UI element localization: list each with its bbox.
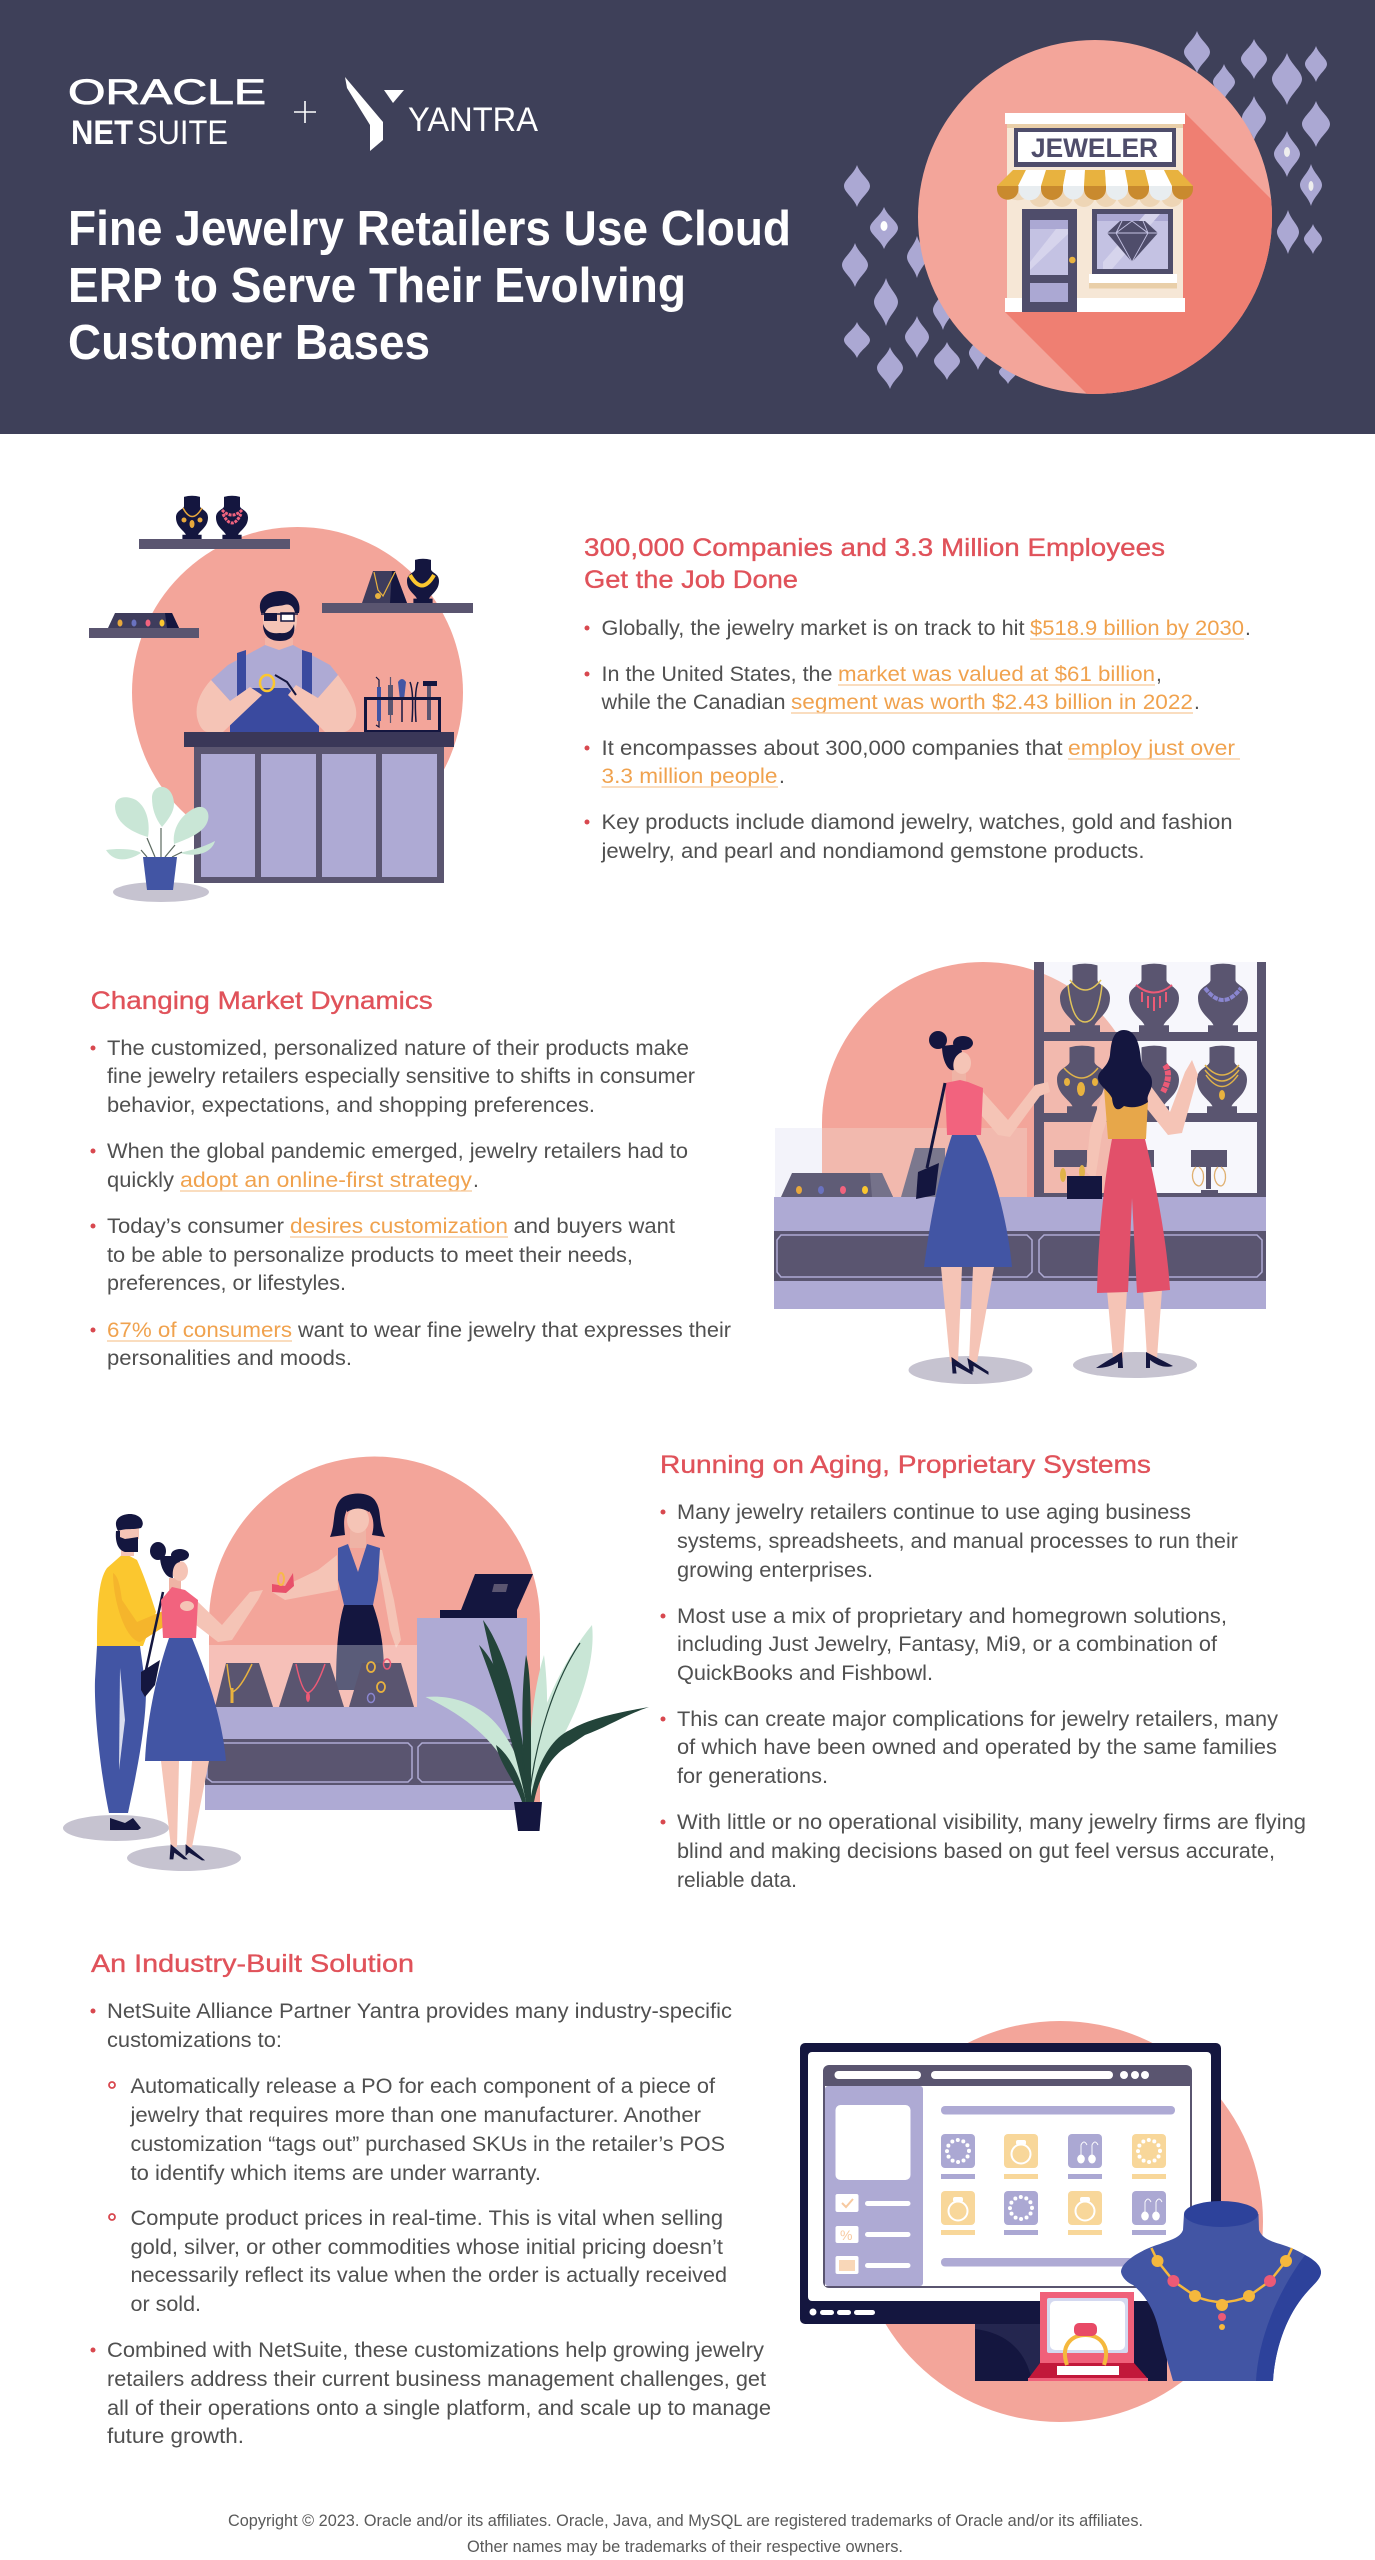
palm plant xyxy=(426,1620,649,1831)
bullet list: customization “tags out” purchased SKUs in the retailer’s POS xyxy=(130,2133,725,2156)
bullet list: Today’s consumer xyxy=(107,1215,284,1238)
bullet list: . xyxy=(1245,617,1251,640)
bullet list: desires customization xyxy=(290,1215,508,1238)
logo: Oracle NetSuite: ORACLE xyxy=(68,73,266,112)
heading: 300,000 Companies and 3.3 Million Employees xyxy=(584,534,1165,562)
bullet list: and buyers want xyxy=(514,1215,675,1238)
panel: market size illustration xyxy=(89,496,473,902)
bullet list: necessarily reflect its value when the order is actually received xyxy=(130,2264,727,2287)
bullet list: NetSuite Alliance Partner Yantra provides many industry-specific xyxy=(107,2000,732,2023)
footer copyright xyxy=(228,2512,1143,2556)
bullet list: growing enterprises. xyxy=(677,1559,873,1582)
heading: Changing Market Dynamics xyxy=(91,987,433,1015)
bullet list xyxy=(660,1501,1306,1892)
title xyxy=(68,202,791,370)
couple of customers xyxy=(63,1514,263,1871)
product tiles xyxy=(941,2134,1166,2235)
shopper in blue skirt xyxy=(908,1031,1050,1384)
shelves with jewelry xyxy=(89,496,473,638)
man xyxy=(95,1514,184,1830)
plus sign xyxy=(294,101,316,123)
workbench xyxy=(184,732,454,883)
counter xyxy=(205,1618,527,1810)
panel: 300,000 companies text xyxy=(584,534,1251,863)
bullet list: 67% of consumers xyxy=(107,1319,292,1342)
bullet list: This can create major complications for jewelry retailers, many xyxy=(677,1708,1279,1731)
panel: monitor and jewelry illustration xyxy=(800,2021,1321,2422)
bullet list: retailers address their current business management challenges, get xyxy=(107,2368,766,2391)
glass case with stands xyxy=(209,1645,417,1707)
logo: Oracle NetSuite: SUITE xyxy=(137,114,228,152)
bullet list: It encompasses about 300,000 companies that xyxy=(602,737,1063,760)
bullet list: In the United States, the xyxy=(602,663,832,686)
bullet list: customizations to: xyxy=(107,2029,282,2052)
bullet list: all of their operations onto a single platform, and scale up to manage xyxy=(107,2397,771,2420)
bullet list: segment was worth $2.43 billion in 2022 xyxy=(791,691,1193,714)
bullet list: for generations. xyxy=(677,1765,828,1788)
bullet list: Most use a mix of proprietary and homegrown solutions, xyxy=(677,1605,1227,1628)
heading: An Industry-Built Solution xyxy=(91,1950,414,1978)
bullet list xyxy=(90,1037,731,1370)
bullet list: reliable data. xyxy=(677,1869,797,1892)
logo: Oracle NetSuite xyxy=(68,73,266,152)
panel: sales counter illustration xyxy=(63,1457,649,1871)
heading xyxy=(584,534,1165,594)
heading: Get the Job Done xyxy=(584,566,798,594)
display case with necklaces xyxy=(1034,962,1266,1197)
seller figure xyxy=(272,1494,401,1690)
bullet list: . xyxy=(779,765,785,788)
salmon backdrop xyxy=(132,527,463,858)
heading: Running on Aging, Proprietary Systems xyxy=(660,1451,1151,1479)
bullet list xyxy=(584,617,1251,863)
bullet list: market was valued at $61 billion xyxy=(838,663,1155,686)
bullet list: gold, silver, or other commodities whose initial pricing doesn’t xyxy=(130,2236,723,2259)
door xyxy=(1022,209,1077,312)
woman xyxy=(141,1542,263,1860)
salmon backdrop xyxy=(822,962,1144,1197)
laptop xyxy=(440,1574,533,1618)
bullet list xyxy=(90,2000,771,2448)
bullet list: QuickBooks and Fishbowl. xyxy=(677,1662,933,1685)
title: Customer Bases xyxy=(68,316,430,370)
necklace bust xyxy=(1121,2201,1321,2381)
bullet list: behavior, expectations, and shopping preferences. xyxy=(107,1094,595,1117)
salmon backdrop xyxy=(209,1457,540,1810)
bullet list: Combined with NetSuite, these customizations help growing jewelry xyxy=(107,2339,765,2362)
bullet list: jewelry, and pearl and nondiamond gemstone products. xyxy=(600,840,1144,863)
panel: aging systems text xyxy=(660,1451,1306,1892)
ring box xyxy=(1028,2292,1148,2381)
jeweler figure xyxy=(197,591,356,732)
panel: industry-built solution text xyxy=(90,1950,771,2448)
bullet list: employ just over xyxy=(1068,737,1235,760)
earring stands xyxy=(1054,1150,1227,1194)
shop window with diamond xyxy=(1089,209,1177,288)
shopper in red trousers xyxy=(1067,1030,1198,1378)
awning xyxy=(997,170,1193,207)
bullet list: blind and making decisions based on gut feel versus accurate, xyxy=(677,1840,1275,1863)
bullet list: including Just Jewelry, Fantasy, Mi9, or a combination of xyxy=(677,1633,1217,1656)
pink beads necklace xyxy=(1163,1065,1168,1092)
bullet list: Globally, the jewelry market is on track to hit xyxy=(602,617,1025,640)
store sign: JEWELER xyxy=(1031,133,1158,163)
footer copyright: Copyright © 2023. Oracle and/or its affiliates. Oracle, Java, and MySQL are registered trademarks of Oracle and/or its affiliates. xyxy=(228,2512,1143,2530)
panel: shoppers at display illustration xyxy=(774,962,1266,1384)
counter-top stands xyxy=(781,1148,945,1197)
bullet list: Compute product prices in real-time. This is vital when selling xyxy=(130,2207,723,2230)
bullet list: systems, spreadsheets, and manual processes to run their xyxy=(677,1530,1238,1553)
bullet list: quickly xyxy=(107,1169,175,1192)
bullet list: $518.9 billion by 2030 xyxy=(1030,617,1244,640)
potted plant xyxy=(106,787,215,902)
bullet list: fine jewelry retailers especially sensitive to shifts in consumer xyxy=(107,1065,695,1088)
glass panels tint xyxy=(775,974,1116,1197)
bullet list: . xyxy=(473,1169,479,1192)
tool rack xyxy=(366,677,440,732)
bullet list: Key products include diamond jewelry, watches, gold and fashion xyxy=(602,811,1232,834)
sidebar filters: % xyxy=(840,2227,852,2243)
bullet list: jewelry that requires more than one manufacturer. Another xyxy=(129,2104,701,2127)
bullet list: 3.3 million people xyxy=(602,765,778,788)
counter xyxy=(774,1197,1266,1309)
bullet list: personalities and moods. xyxy=(107,1347,352,1370)
bullet list: while the Canadian xyxy=(600,691,786,714)
bullet list: future growth. xyxy=(107,2425,244,2448)
title: Fine Jewelry Retailers Use Cloud xyxy=(68,202,791,256)
bullet list: Many jewelry retailers continue to use aging business xyxy=(677,1501,1191,1524)
bullet list: , xyxy=(1156,663,1162,686)
footer copyright: Other names may be trademarks of their respective owners. xyxy=(467,2538,903,2556)
panel: changing market dynamics text xyxy=(90,987,731,1370)
header banner xyxy=(0,0,1375,434)
monitor xyxy=(800,2043,1221,2381)
bullet list: . xyxy=(1194,691,1200,714)
salmon backdrop xyxy=(857,2021,1263,2422)
bullet list: to be able to personalize products to meet their needs, xyxy=(107,1244,633,1267)
bullet list: preferences, or lifestyles. xyxy=(107,1272,346,1295)
bullet list: want to wear fine jewelry that expresses their xyxy=(297,1319,731,1342)
bullet list: When the global pandemic emerged, jewelry retailers had to xyxy=(107,1140,688,1163)
jeweler storefront xyxy=(997,113,1193,312)
ring box xyxy=(272,1573,294,1593)
decorative lilac gems xyxy=(842,31,1330,389)
logo: Oracle NetSuite: NET xyxy=(71,114,133,152)
logo: Yantra xyxy=(345,77,538,151)
salmon circle with long shadow xyxy=(918,40,1272,394)
bullet list: of which have been owned and operated by the same families xyxy=(677,1736,1277,1759)
bullet list: adopt an online-first strategy xyxy=(180,1169,473,1192)
sidebar filters xyxy=(836,2194,910,2274)
bullet list: to identify which items are under warranty. xyxy=(130,2162,541,2185)
title: ERP to Serve Their Evolving xyxy=(68,259,686,313)
bullet list: Automatically release a PO for each component of a piece of xyxy=(130,2075,715,2098)
logo: Yantra: YANTRA xyxy=(408,101,538,139)
bullet list: The customized, personalized nature of their products make xyxy=(107,1037,689,1060)
bullet list: With little or no operational visibility, many jewelry firms are flying xyxy=(677,1811,1306,1834)
bullet list: or sold. xyxy=(130,2293,201,2316)
